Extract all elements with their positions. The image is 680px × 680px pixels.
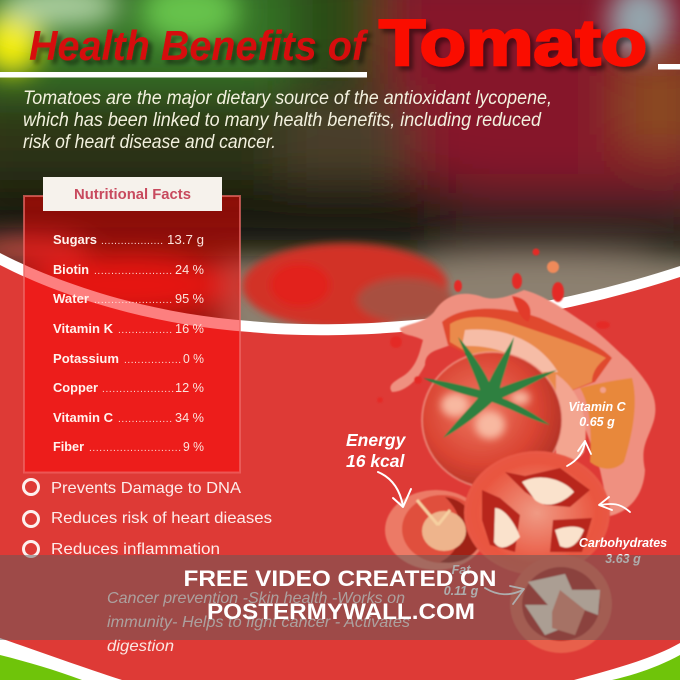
row: copper: 12 %: [175, 380, 204, 395]
description text: digestion: [107, 638, 174, 655]
row: vitamin k: Vitamin K: [53, 322, 113, 336]
row: potassium: 0 %: [183, 351, 204, 366]
row: water: Water: [53, 292, 89, 306]
arrow: fat: [485, 586, 524, 604]
watermark text: FREE VIDEO CREATED ON: [184, 566, 496, 591]
row: copper: [53, 380, 204, 395]
row: water: .......................: [94, 295, 172, 306]
row: vitamin c: ................: [118, 414, 172, 425]
left tomato slice: [385, 490, 487, 570]
row: fiber: ...........................: [89, 443, 181, 454]
row: copper: Copper: [53, 381, 98, 395]
bullet: reduces inflammation: Reduces inflammation: [51, 541, 220, 558]
label: carbohydrates: [579, 536, 667, 566]
row: potassium: .................: [124, 355, 181, 366]
intro text: [23, 88, 552, 153]
row: vitamin c: [53, 410, 204, 425]
tomato stem: [423, 337, 557, 438]
row: vitamin k: ................: [118, 325, 172, 336]
panel: nutritional facts: [24, 177, 240, 472]
tomato highlights: [441, 391, 530, 439]
label: energy: [346, 430, 407, 471]
row: sugars: ...................: [101, 236, 163, 247]
arrow: energy: [378, 472, 411, 507]
label: carbohydrates: 3.63 g: [605, 552, 641, 566]
description text: Cancer prevention -Skin health -Works on: [107, 590, 405, 607]
red body background: [0, 265, 680, 680]
row: vitamin c: 34 %: [175, 410, 204, 425]
label: energy: Energy: [346, 430, 407, 450]
label: energy: 16 kcal: [346, 451, 406, 471]
row: vitamin k: 16 %: [175, 321, 204, 336]
title underline right: [658, 64, 680, 70]
illustration: tomato splash: [377, 248, 655, 653]
row: fiber: 9 %: [183, 439, 204, 454]
bottom left corner swoosh: [0, 638, 122, 680]
watermark text: POSTERMYWALL.COM: [207, 599, 475, 624]
label: carbohydrates: Carbohydrates: [579, 536, 667, 550]
bullet: prevents damage to DNA: Prevents Damage to DNA: [51, 480, 241, 497]
row: biotin: Biotin: [53, 263, 89, 277]
row: vitamin k: [53, 321, 204, 336]
row: copper: .....................: [102, 384, 174, 395]
juice splash: [390, 290, 655, 516]
label: vitamin C: 0.65 g: [579, 415, 615, 429]
droplets: [377, 248, 610, 403]
panel header: Nutritional Facts: [74, 186, 191, 203]
white curve top: [0, 253, 680, 400]
row: biotin: .......................: [94, 266, 172, 277]
whole tomato: [422, 352, 562, 488]
row: sugars: [53, 232, 204, 247]
row: sugars: Sugars: [53, 233, 97, 247]
title: Health Benefits of: Health Benefits of: [29, 22, 369, 69]
bullet: reduces risk of heart diseases: Reduces risk of heart dieases: [51, 510, 272, 527]
intro text: Tomatoes are the major dietary source of the antioxidant lycopene,: [23, 88, 552, 109]
title: Tomato: Tomato: [379, 6, 647, 79]
big tomato slice: [464, 451, 610, 575]
blurred photo background: [0, 0, 680, 348]
row: fiber: [53, 439, 204, 454]
watermark band: [0, 555, 680, 640]
row: water: 95 %: [175, 291, 204, 306]
row: vitamin c: Vitamin C: [53, 411, 113, 425]
row: biotin: 24 %: [175, 262, 204, 277]
row: biotin: [53, 262, 204, 277]
watermark text: [184, 566, 496, 624]
label: fat: Fat: [452, 563, 471, 577]
label: fat: 0.11 g: [444, 584, 479, 598]
label: vitamin C: [568, 400, 627, 429]
panel header: [43, 177, 222, 211]
row: water: [53, 291, 204, 306]
bottom tomato slice: [510, 555, 612, 653]
row: sugars: 13.7 g: [167, 232, 204, 247]
label: fat: [444, 563, 479, 598]
arrow: vitamin C: [567, 441, 591, 466]
intro text: which has been linked to many health benefits, including reduced: [23, 110, 542, 131]
row: potassium: [53, 351, 204, 366]
title underline left: [0, 72, 367, 78]
bottom right corner swoosh: [574, 643, 680, 680]
label: vitamin C: Vitamin C: [568, 400, 627, 414]
description text: [107, 590, 410, 655]
intro text: risk of heart disease and cancer.: [23, 132, 276, 153]
arrow: carbohydrates: [599, 497, 630, 512]
row: potassium: Potassium: [53, 352, 119, 366]
description text: immunity- Helps to fight cancer - Activates: [107, 614, 410, 631]
row: fiber: Fiber: [53, 440, 84, 454]
